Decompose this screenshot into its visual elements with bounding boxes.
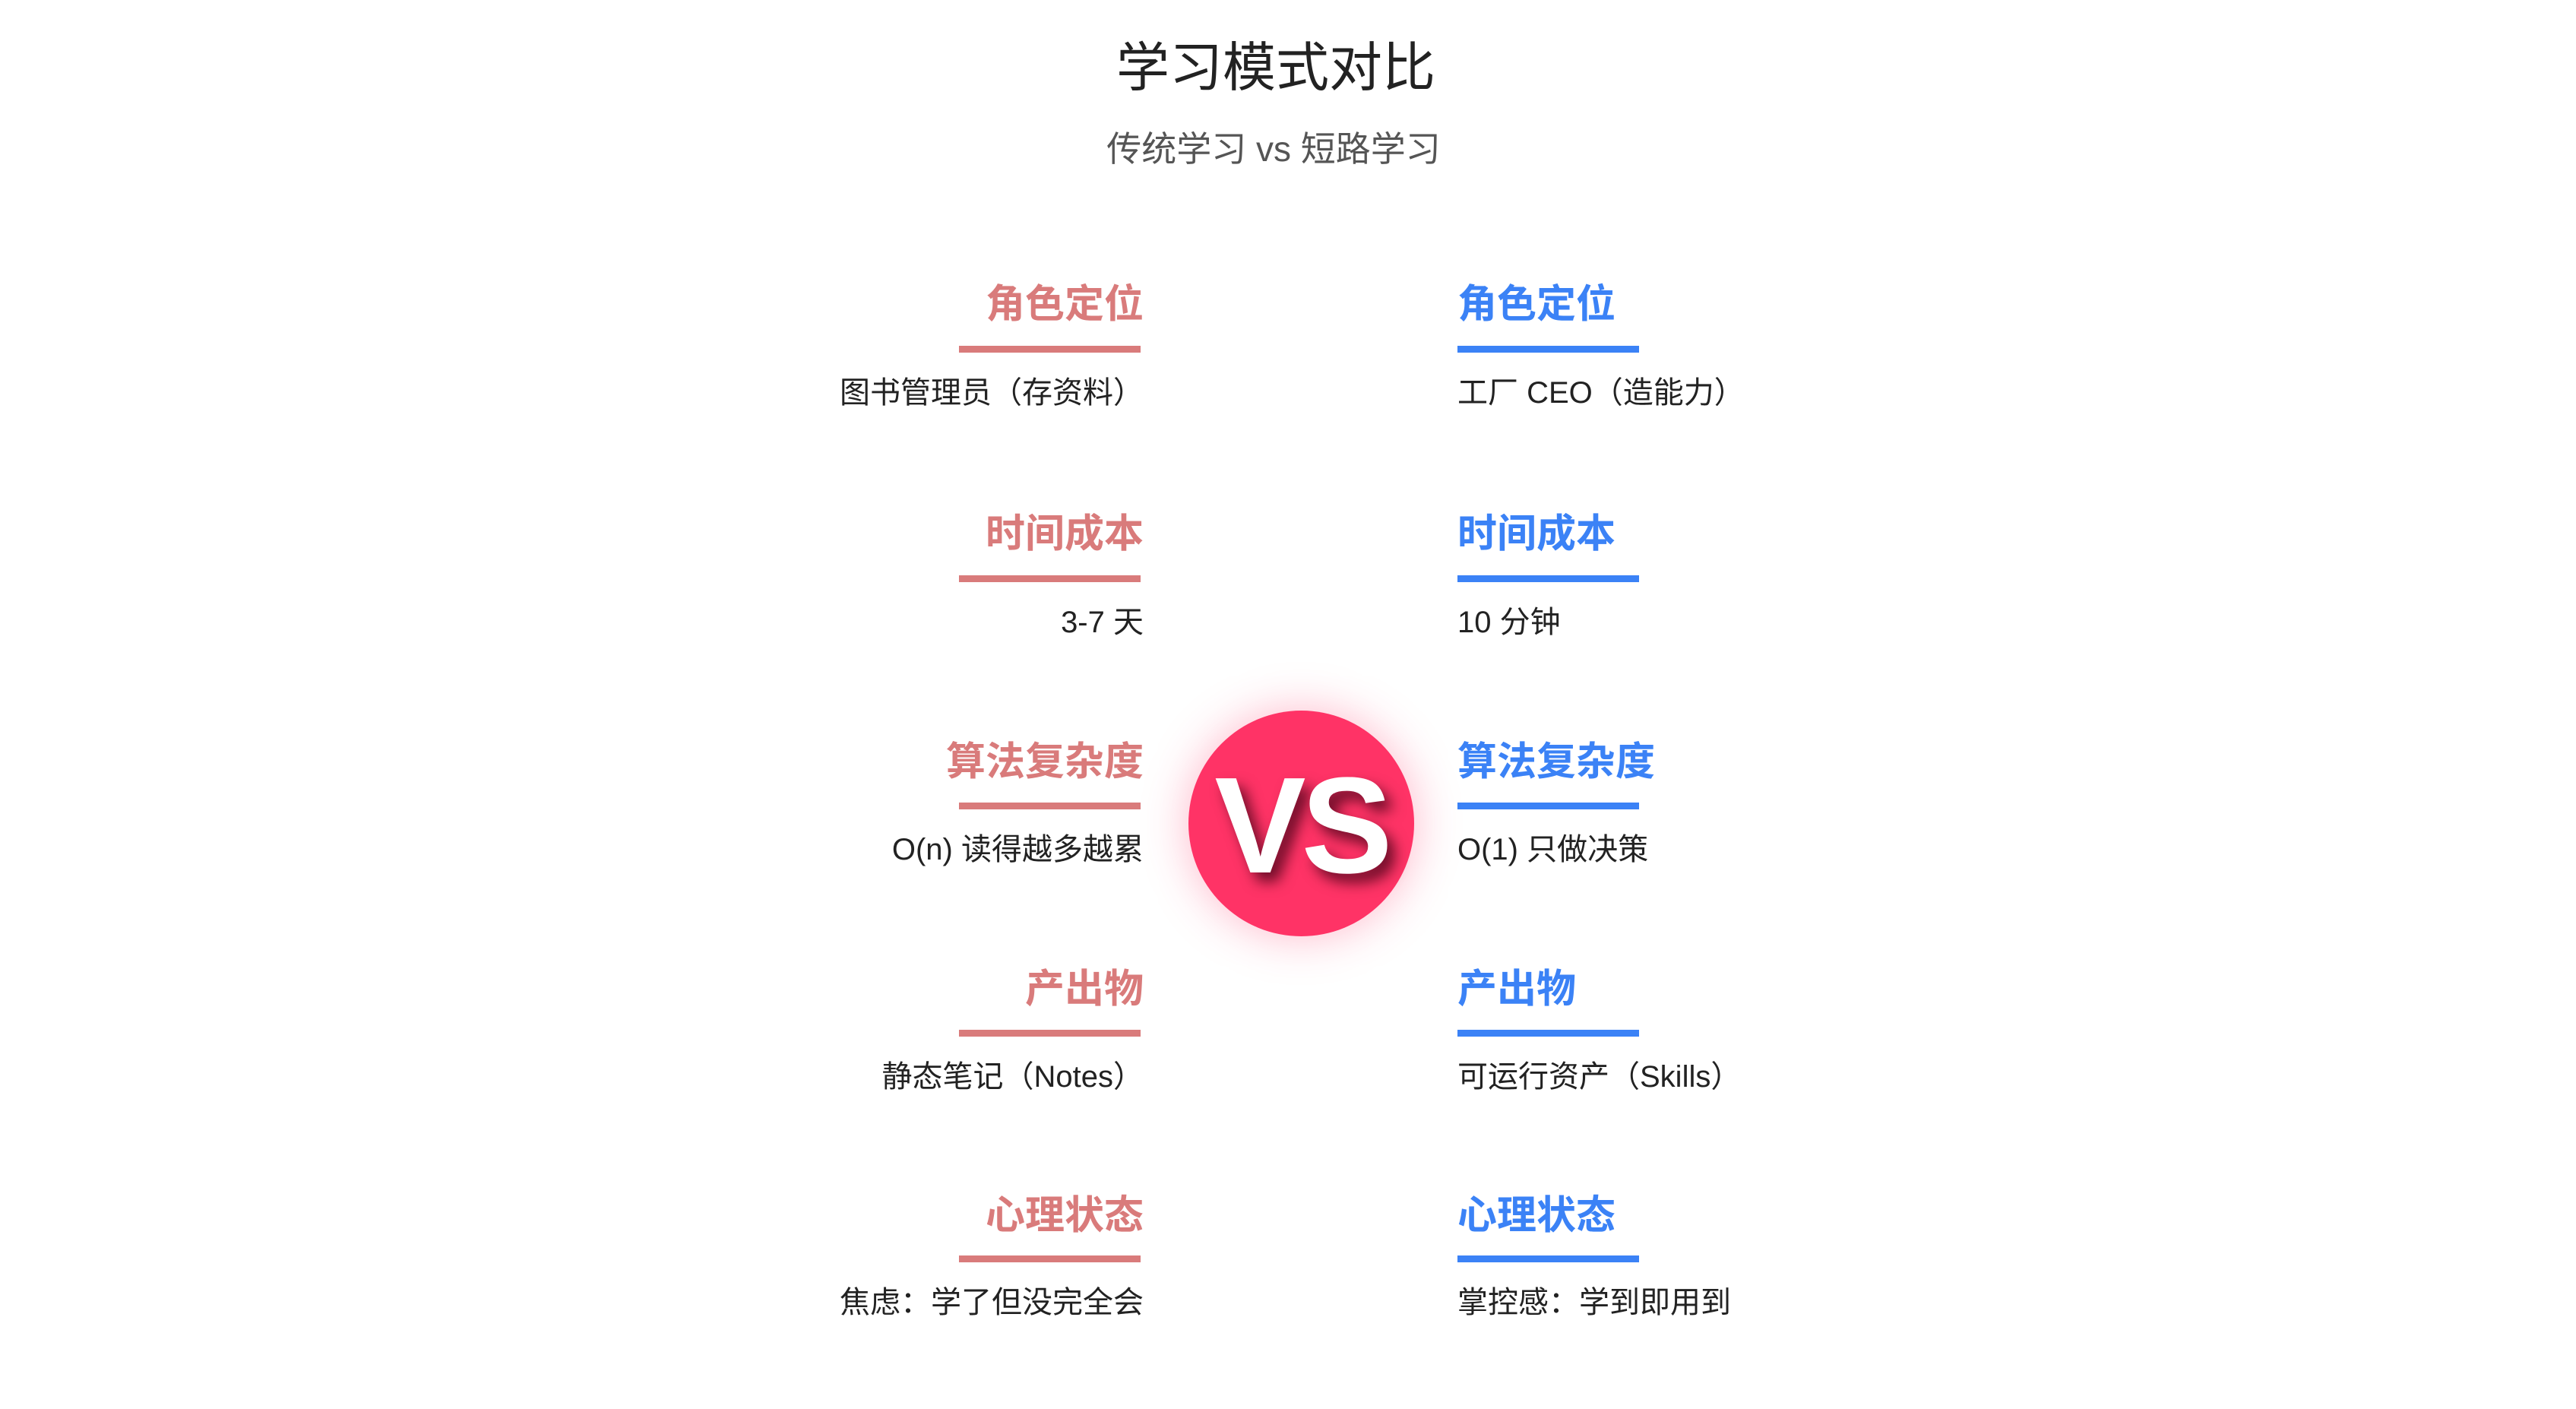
VS badge xyxy=(1188,711,1414,936)
row: 时间成本 right: 时间成本 xyxy=(1457,512,1616,556)
row: 算法复杂度 right: 算法复杂度 xyxy=(1457,740,1655,784)
row: 角色定位 right: 角色定位 xyxy=(1457,283,1616,327)
row: 心理状态 right: 心理状态 xyxy=(1457,1194,1616,1238)
text: 焦虑：学了但没完全会 xyxy=(840,1286,1144,1319)
row: 角色定位 left: 角色定位 xyxy=(986,283,1144,327)
text: 可运行资产（Skills） xyxy=(1457,1060,1741,1094)
row: 心理状态 left: 心理状态 xyxy=(986,1194,1144,1238)
VS badge: VS xyxy=(1214,749,1388,902)
row: 算法复杂度 left: 算法复杂度 xyxy=(946,740,1144,784)
text: 静态笔记（Notes） xyxy=(881,1060,1144,1094)
subtitle: 传统学习 vs 短路学习 xyxy=(1106,129,1441,169)
text: 图书管理员（存资料） xyxy=(840,376,1144,410)
row: 产出物 right: 产出物 xyxy=(1457,967,1576,1012)
title: 学习模式对比 xyxy=(1116,38,1435,97)
text: O(n) 读得越多越累 xyxy=(892,833,1144,866)
row: 时间成本 left: 时间成本 xyxy=(986,512,1144,556)
text: 3-7 天 xyxy=(1061,606,1144,639)
text: O(1) 只做决策 xyxy=(1457,833,1648,866)
text: 10 分钟 xyxy=(1457,606,1561,639)
text: 掌控感：学到即用到 xyxy=(1457,1286,1731,1319)
row: 产出物 left: 产出物 xyxy=(1025,967,1144,1012)
text: 工厂 CEO（造能力） xyxy=(1457,376,1745,410)
